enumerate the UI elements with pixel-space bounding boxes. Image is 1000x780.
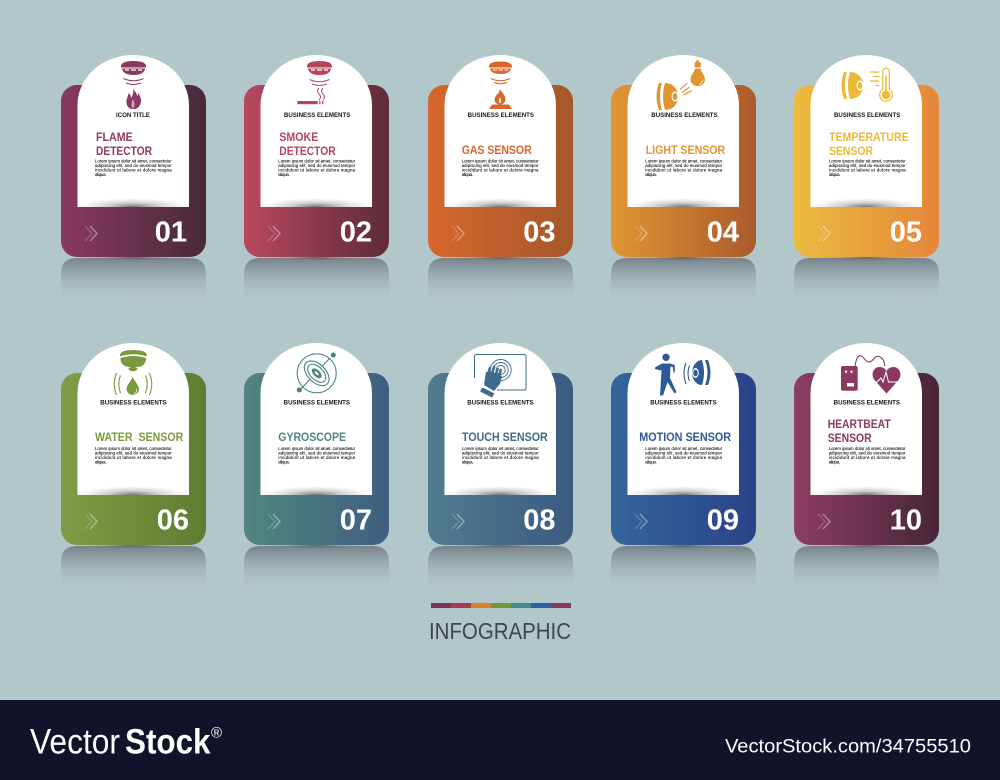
reflection bbox=[428, 546, 573, 588]
body text: adipiscing elit, sed do eiusmod tempor bbox=[462, 163, 539, 168]
reflection bbox=[611, 258, 756, 300]
card base bbox=[428, 85, 573, 257]
body text: incididunt ut labore et dolore magna bbox=[645, 168, 723, 172]
registered mark: ® bbox=[211, 724, 222, 742]
body text: incididunt ut labore et dolore magna bbox=[462, 168, 539, 172]
body text: aliqua. bbox=[645, 172, 657, 177]
icon: smoke detector bbox=[297, 61, 332, 104]
heading bbox=[828, 417, 891, 445]
body text: incididunt ut labore et dolore magna bbox=[95, 168, 172, 172]
icon: touch sensor bbox=[474, 354, 526, 398]
card base bbox=[611, 373, 756, 545]
body text: Lorem ipsum dolor sit amet, consectetur bbox=[95, 158, 172, 163]
card shadow bbox=[86, 257, 180, 260]
icon: chevrons bbox=[818, 226, 830, 241]
card shadow bbox=[636, 257, 730, 260]
heading: DETECTOR bbox=[279, 144, 336, 158]
icon: water sensor bbox=[114, 350, 152, 395]
panel: 10 heartbeat sensor bbox=[794, 343, 939, 588]
body text: adipiscing elit, sed do eiusmod tempor bbox=[95, 163, 172, 168]
body text: Lorem ipsum dolor sit amet, consectetur bbox=[829, 158, 906, 163]
white arch panel bbox=[260, 343, 372, 495]
card base bbox=[794, 85, 939, 257]
icon label: BUSINESS ELEMENTS bbox=[284, 112, 350, 119]
card base bbox=[61, 373, 206, 545]
footer bar bbox=[0, 700, 1000, 780]
white arch panel bbox=[628, 55, 739, 207]
reflection bbox=[61, 258, 206, 300]
body text: aliqua. bbox=[278, 172, 290, 177]
panel shadow bbox=[816, 199, 916, 207]
number: 08 bbox=[523, 504, 556, 536]
body text: aliqua. bbox=[462, 460, 474, 465]
body text bbox=[95, 158, 172, 177]
icon: motion sensor bbox=[655, 354, 710, 396]
heading bbox=[829, 130, 909, 158]
number: 03 bbox=[523, 216, 556, 248]
body text: incididunt ut labore et dolore magna bbox=[645, 455, 723, 460]
icon: chevrons bbox=[85, 514, 97, 529]
panel: 09 motion sensor bbox=[611, 343, 756, 588]
body text: incididunt ut labore et dolore magna bbox=[829, 455, 906, 460]
white arch panel bbox=[260, 55, 372, 207]
heading: TEMPERATURE bbox=[829, 130, 909, 144]
card shadow bbox=[86, 545, 180, 548]
number: 09 bbox=[707, 504, 739, 536]
panel shadow bbox=[816, 487, 916, 495]
panel shadow bbox=[450, 199, 550, 207]
icon: light sensor bbox=[656, 60, 705, 110]
body text: adipiscing elit, sed do eiusmod tempor bbox=[645, 450, 723, 455]
panel: 02 smoke detector bbox=[244, 55, 389, 300]
body text: aliqua. bbox=[278, 460, 290, 465]
card base bbox=[611, 85, 756, 257]
panel shadow bbox=[450, 487, 550, 495]
body text: Lorem ipsum dolor sit amet, consectetur bbox=[645, 158, 723, 163]
body text: Lorem ipsum dolor sit amet, consectetur bbox=[462, 158, 539, 163]
panel: 08 touch sensor bbox=[428, 343, 573, 588]
icon: chevrons bbox=[268, 514, 280, 529]
card shadow bbox=[269, 545, 362, 548]
body text: Lorem ipsum dolor sit amet, consectetur bbox=[95, 446, 172, 451]
body text: incididunt ut labore et dolore magna bbox=[278, 455, 356, 460]
heading: TOUCH SENSOR bbox=[462, 430, 548, 444]
body text bbox=[829, 446, 906, 465]
heading bbox=[96, 130, 152, 158]
number: 04 bbox=[707, 216, 739, 248]
body text: Lorem ipsum dolor sit amet, consectetur bbox=[278, 446, 356, 451]
body text: incididunt ut labore et dolore magna bbox=[278, 168, 356, 172]
body text: Lorem ipsum dolor sit amet, consectetur bbox=[278, 158, 356, 163]
icon label: BUSINESS ELEMENTS bbox=[834, 400, 900, 406]
icon: chevrons bbox=[452, 514, 464, 529]
panel: 04 light sensor bbox=[611, 55, 756, 300]
title: INFOGRAPHIC bbox=[429, 618, 571, 644]
card base bbox=[794, 373, 939, 545]
panel shadow bbox=[84, 199, 182, 207]
heading: SMOKE bbox=[279, 130, 318, 144]
white arch panel bbox=[78, 55, 189, 207]
panel shadow bbox=[634, 199, 732, 207]
white arch panel bbox=[444, 55, 556, 207]
icon label: BUSINESS ELEMENTS bbox=[284, 400, 350, 406]
body text bbox=[829, 158, 906, 177]
reflection bbox=[244, 546, 389, 588]
reflection bbox=[794, 258, 939, 300]
number: 02 bbox=[340, 216, 372, 248]
heading: HEARTBEAT bbox=[828, 417, 891, 431]
body text: adipiscing elit, sed do eiusmod tempor bbox=[829, 450, 906, 455]
icon: chevrons bbox=[818, 514, 830, 529]
card shadow bbox=[269, 257, 362, 260]
body text: adipiscing elit, sed do eiusmod tempor bbox=[278, 163, 356, 168]
body text bbox=[645, 158, 723, 177]
icon label: BUSINESS ELEMENTS bbox=[468, 112, 534, 119]
icon: temperature sensor bbox=[842, 68, 892, 101]
heading: MOTION SENSOR bbox=[639, 430, 731, 444]
panel: 05 temperature sensor bbox=[794, 55, 939, 300]
panel: 07 gyroscope bbox=[244, 343, 389, 588]
panel shadow bbox=[634, 487, 732, 495]
reflection bbox=[244, 258, 389, 300]
card shadow bbox=[453, 545, 546, 548]
heading: GYROSCOPE bbox=[278, 430, 346, 444]
card base bbox=[428, 373, 573, 545]
body text: adipiscing elit, sed do eiusmod tempor bbox=[95, 450, 172, 455]
icon: chevrons bbox=[268, 226, 280, 241]
body text: aliqua. bbox=[462, 172, 473, 177]
number: 07 bbox=[340, 504, 372, 536]
icon: heartbeat sensor bbox=[841, 356, 900, 394]
body text: incididunt ut labore et dolore magna bbox=[462, 455, 539, 460]
body text: Lorem ipsum dolor sit amet, consectetur bbox=[829, 446, 906, 451]
heading: DETECTOR bbox=[96, 144, 152, 158]
icon: gyroscope bbox=[297, 353, 336, 393]
body text: adipiscing elit, sed do eiusmod tempor bbox=[462, 450, 539, 455]
body text: adipiscing elit, sed do eiusmod tempor bbox=[278, 450, 356, 455]
number: 05 bbox=[890, 216, 922, 248]
heading: WATER SENSOR bbox=[95, 430, 184, 444]
heading: LIGHT SENSOR bbox=[646, 143, 726, 157]
icon label: BUSINESS ELEMENTS bbox=[834, 112, 900, 119]
colored legend bar bbox=[431, 603, 571, 608]
panel: 01 flame detector bbox=[61, 55, 206, 300]
card base bbox=[61, 85, 206, 257]
card shadow bbox=[636, 545, 730, 548]
card base bbox=[244, 85, 389, 257]
icon label: BUSINESS ELEMENTS bbox=[467, 400, 534, 406]
card base bbox=[244, 373, 389, 545]
body text: adipiscing elit, sed do eiusmod tempor bbox=[829, 163, 906, 168]
icon: gas sensor bbox=[489, 62, 512, 109]
reflection bbox=[611, 546, 756, 588]
card shadow bbox=[819, 545, 912, 548]
panel shadow bbox=[84, 487, 182, 495]
panel: 03 gas sensor bbox=[428, 55, 573, 300]
icon label: ICON TITLE bbox=[116, 112, 150, 119]
white arch panel bbox=[628, 343, 739, 495]
body text: aliqua. bbox=[829, 460, 840, 465]
icon label: BUSINESS ELEMENTS bbox=[650, 400, 717, 406]
icon: chevrons bbox=[635, 514, 647, 529]
heading: FLAME bbox=[96, 130, 133, 144]
heading: SENSOR bbox=[829, 144, 873, 158]
body text bbox=[278, 446, 356, 465]
icon label: BUSINESS ELEMENTS bbox=[100, 400, 167, 406]
body text: Lorem ipsum dolor sit amet, consectetur bbox=[645, 446, 723, 451]
panel shadow bbox=[266, 487, 366, 495]
body text: incididunt ut labore et dolore magna bbox=[829, 168, 906, 172]
icon: chevrons bbox=[85, 226, 97, 241]
body text: incididunt ut labore et dolore magna bbox=[95, 455, 172, 460]
body text bbox=[645, 446, 723, 465]
number: 10 bbox=[890, 504, 922, 536]
brand logo: Vector: Vector bbox=[30, 722, 120, 761]
heading bbox=[279, 130, 336, 158]
body text: aliqua. bbox=[95, 172, 106, 177]
panel: 06 water sensor bbox=[61, 343, 206, 588]
icon label: BUSINESS ELEMENTS bbox=[651, 112, 718, 119]
card shadow bbox=[819, 257, 912, 260]
body text: aliqua. bbox=[95, 460, 106, 465]
white arch panel bbox=[810, 55, 922, 207]
body text: Lorem ipsum dolor sit amet, consectetur bbox=[462, 446, 539, 451]
number: 01 bbox=[155, 216, 187, 248]
image id: VectorStock.com/34755510 bbox=[725, 736, 971, 758]
icon: chevrons bbox=[452, 226, 464, 241]
reflection bbox=[428, 258, 573, 300]
heading: SENSOR bbox=[828, 431, 872, 445]
icon: chevrons bbox=[635, 226, 647, 241]
card shadow bbox=[453, 257, 546, 260]
brand logo: Stock: Stock bbox=[125, 722, 211, 761]
panel shadow bbox=[266, 199, 366, 207]
icon: flame detector bbox=[121, 61, 146, 109]
reflection bbox=[794, 546, 939, 588]
white arch panel bbox=[444, 343, 556, 495]
number: 06 bbox=[157, 504, 189, 536]
white arch panel bbox=[78, 343, 189, 495]
reflection bbox=[61, 546, 206, 588]
heading: GAS SENSOR bbox=[462, 143, 532, 157]
body text bbox=[278, 158, 356, 177]
body text bbox=[462, 158, 539, 177]
white arch panel bbox=[810, 343, 922, 495]
body text: aliqua. bbox=[829, 172, 840, 177]
body text bbox=[462, 446, 539, 465]
body text: aliqua. bbox=[645, 460, 657, 465]
body text: adipiscing elit, sed do eiusmod tempor bbox=[645, 163, 723, 168]
body text bbox=[95, 446, 172, 465]
